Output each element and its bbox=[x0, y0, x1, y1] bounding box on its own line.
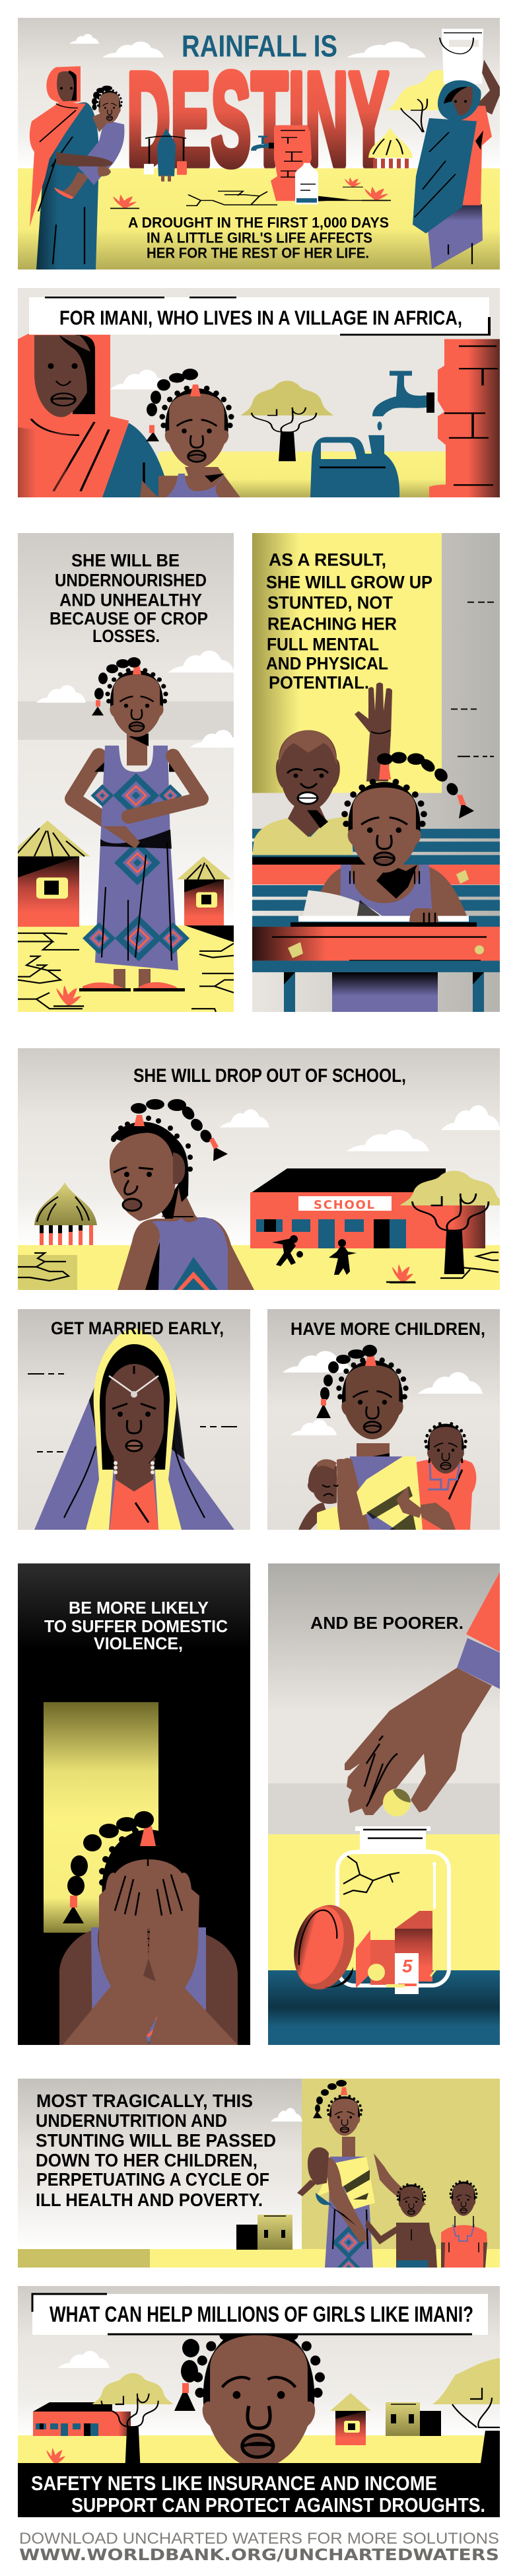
text bbox=[266, 550, 432, 692]
figure: baby bbox=[298, 1459, 340, 1530]
text: AS A RESULT, bbox=[269, 550, 386, 569]
subtitle text: IN A LITTLE GIRL'S LIFE AFFECTS bbox=[147, 230, 372, 246]
sign bbox=[298, 1196, 392, 1212]
icon: right tree bbox=[432, 2358, 500, 2463]
caption box bbox=[29, 297, 489, 335]
icon: hut bbox=[330, 2393, 371, 2445]
caption band bottom bbox=[18, 2463, 500, 2517]
figure: woman carrying girl bbox=[30, 66, 124, 269]
panel: married early bbox=[18, 1309, 250, 1530]
caption band bottom: SAFETY NETS LIKE INSURANCE AND INCOME bbox=[31, 2472, 437, 2495]
text: BE MORE LIKELY bbox=[69, 1598, 209, 1618]
icon: jar: 5 bbox=[402, 1956, 413, 1976]
icon: round hut bbox=[368, 128, 413, 168]
text: LOSSES. bbox=[92, 626, 160, 646]
panel: poorer bbox=[268, 1563, 500, 2045]
panel: more children bbox=[267, 1309, 500, 1530]
icon: children playing bbox=[272, 1235, 357, 1275]
icon: white water jug bbox=[295, 163, 318, 204]
icon: coral tower bbox=[429, 339, 500, 497]
dashes bbox=[28, 1374, 237, 1452]
icon: tree bbox=[92, 2373, 174, 2466]
figure: woman with bucket bbox=[413, 29, 502, 269]
text: TO SUFFER DOMESTIC bbox=[44, 1616, 228, 1636]
panel: domestic violence bbox=[18, 1563, 250, 2045]
figure: imani face bbox=[174, 2321, 325, 2468]
icon: jar bbox=[286, 1826, 449, 1996]
icon: hand with coin bbox=[345, 1668, 492, 1816]
text: FULL MENTAL bbox=[267, 634, 379, 654]
figure: girl bbox=[140, 369, 240, 497]
icon: tree bbox=[241, 380, 333, 461]
window bbox=[44, 1702, 158, 1933]
footer: WWW.WORLDBANK.ORG/UNCHARTEDWATERS bbox=[19, 2546, 499, 2564]
text: SHE WILL GROW UP bbox=[266, 572, 432, 592]
panel: undernourished bbox=[18, 533, 234, 1012]
figure: mother bbox=[18, 328, 170, 497]
figure: imani covering face bbox=[59, 1811, 238, 2053]
panel: what can help bbox=[18, 2286, 500, 2517]
figure: mother with children bbox=[297, 2080, 487, 2279]
text: PERPETUATING A CYCLE OF bbox=[36, 2169, 269, 2190]
text: SHE WILL BE bbox=[71, 550, 180, 570]
icon: house bbox=[236, 2215, 292, 2250]
text: VIOLENCE, bbox=[94, 1633, 183, 1653]
subtitle text bbox=[128, 215, 389, 261]
text bbox=[50, 550, 208, 646]
icon: water tower and tap bbox=[251, 125, 312, 201]
figure: imani looking back bbox=[110, 1099, 254, 1290]
caption box top bbox=[32, 2294, 488, 2335]
text: AND UNHEALTHY bbox=[59, 590, 202, 610]
text: UNDERNOURISHED bbox=[55, 570, 207, 590]
text: REACHING HER bbox=[267, 614, 397, 633]
icon: house bbox=[386, 2402, 441, 2436]
icon: school bbox=[33, 2402, 131, 2436]
text bbox=[36, 2091, 276, 2210]
icon: jerrycan bbox=[310, 435, 399, 497]
desk bbox=[252, 927, 500, 1012]
text: AND BE POORER. bbox=[310, 1613, 464, 1633]
icon: right hut bbox=[177, 856, 231, 925]
text bbox=[44, 1598, 228, 1653]
text: STUNTED, NOT bbox=[267, 592, 393, 612]
icon: plant bbox=[390, 1264, 416, 1283]
panel: imani bbox=[18, 288, 500, 497]
text: SHE WILL DROP OUT OF SCHOOL, bbox=[133, 1065, 406, 1087]
icon: water tap bbox=[372, 371, 434, 431]
icon: school building bbox=[250, 1168, 485, 1248]
figure: mother bbox=[316, 1345, 423, 1530]
text: HAVE MORE CHILDREN, bbox=[291, 1319, 485, 1339]
text: POTENTIAL. bbox=[269, 672, 369, 692]
older child bbox=[441, 2180, 487, 2268]
cracks bbox=[18, 933, 234, 1012]
icon: sleeve bbox=[457, 1572, 500, 1689]
footer bbox=[19, 2530, 499, 2564]
figure: bride bbox=[34, 1329, 234, 1530]
figure: imani at desk bbox=[291, 752, 477, 929]
text: BECAUSE OF CROP bbox=[50, 608, 208, 629]
panel: drop out of school bbox=[18, 1048, 500, 1290]
footer: DOWNLOAD UNCHARTED WATERS FOR MORE SOLUTIONS bbox=[19, 2530, 499, 2548]
dashes bbox=[451, 602, 494, 756]
figure: water carrier bbox=[144, 128, 187, 182]
subtitle text: HER FOR THE REST OF HER LIFE. bbox=[147, 245, 369, 261]
figure: boy raising hand bbox=[252, 682, 392, 855]
figure: child in red bbox=[413, 1422, 476, 1530]
panel: title bbox=[18, 18, 500, 269]
text: UNDERNUTRITION AND bbox=[36, 2110, 227, 2131]
text: ILL HEALTH AND POVERTY. bbox=[36, 2190, 263, 2210]
panel: passed down bbox=[18, 2079, 500, 2268]
icon: plants bbox=[110, 178, 391, 208]
icon: left hut bbox=[7, 820, 90, 927]
icon: tree bbox=[399, 1170, 509, 1274]
figure: imani standing bbox=[73, 657, 201, 990]
icon: tree with yellow canopy bbox=[386, 70, 485, 132]
sign: SCHOOL bbox=[314, 1198, 374, 1212]
icon: plants bbox=[44, 2448, 67, 2464]
heading: rainfall is: RAINFALL IS bbox=[182, 28, 337, 63]
text: MOST TRAGICALLY, THIS bbox=[36, 2091, 253, 2111]
boy bbox=[365, 2183, 437, 2268]
icon: hut bbox=[34, 1182, 97, 1245]
icon: plant bbox=[53, 985, 84, 1006]
bench bbox=[252, 829, 500, 927]
text: STUNTING WILL BE PASSED bbox=[36, 2130, 276, 2151]
cracks in the ground bbox=[186, 191, 387, 205]
panel: stunted bbox=[252, 533, 500, 1012]
text: GET MARRIED EARLY, bbox=[51, 1318, 224, 1338]
icon: cracks bbox=[18, 1252, 498, 1281]
text: AND PHYSICAL bbox=[266, 653, 388, 673]
text: DOWN TO HER CHILDREN, bbox=[36, 2150, 258, 2170]
